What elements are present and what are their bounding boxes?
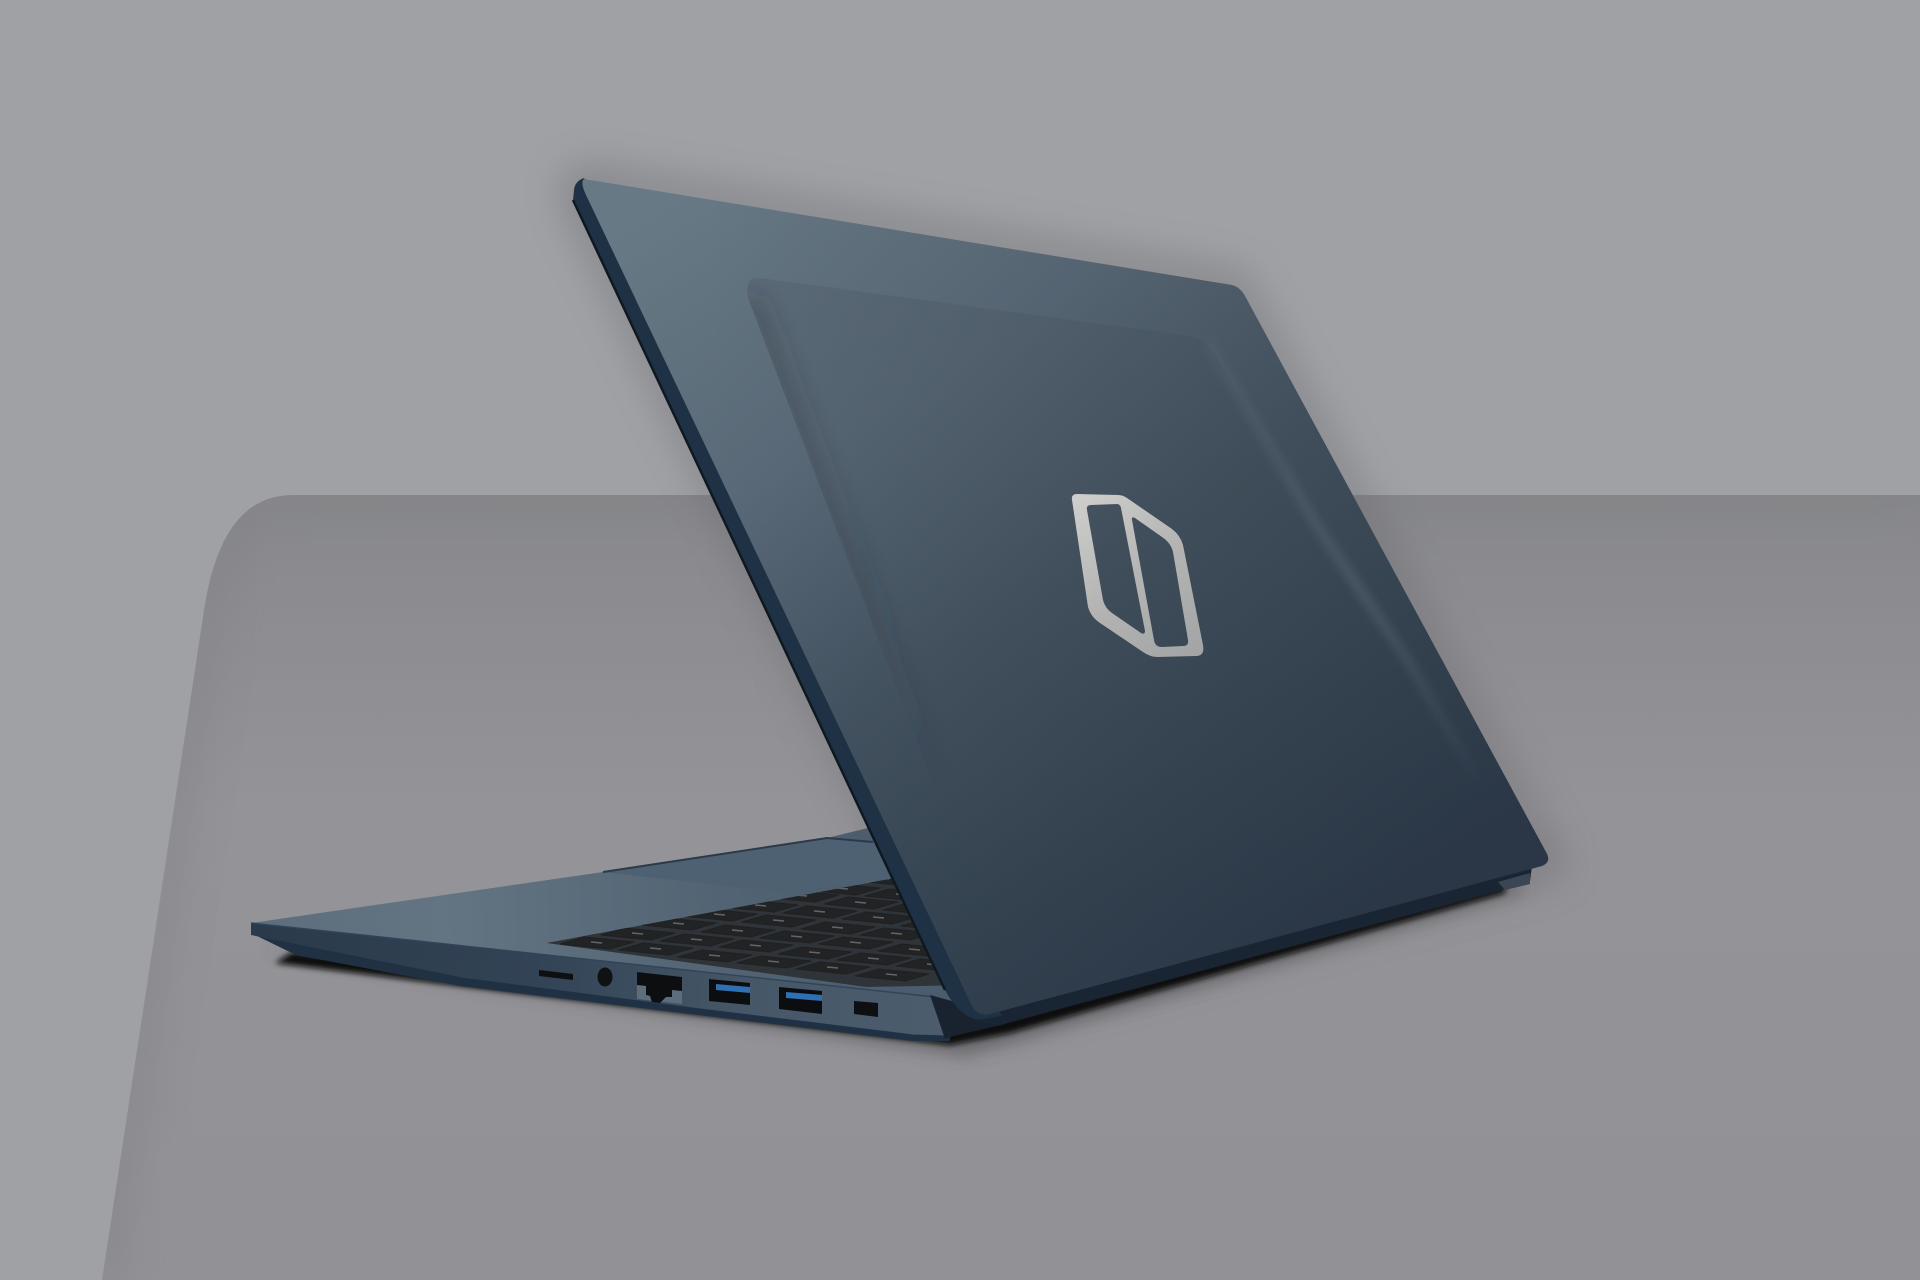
table surface [102,495,1920,1280]
port: USB 2 [779,987,822,1014]
side face with ports [251,923,948,1037]
deck surface [251,828,990,1005]
hinge foot [1498,873,1530,890]
lid base strip [975,866,1532,1025]
port: audio jack [598,968,612,986]
hinge block [930,995,1005,1039]
keyboard [547,878,942,987]
base underside wedge [251,925,950,1041]
lid soft shadow [575,179,1549,1016]
lid recessed panel [747,278,1426,692]
touchpad [603,838,905,892]
port: SD card slot [539,970,573,980]
port: lock slot [854,1001,878,1017]
port: ethernet [637,972,682,1004]
port: USB 1 [709,979,750,1005]
base shadow on the table [262,880,1530,1056]
lid [582,179,1548,1015]
laptop base [251,828,1005,1041]
logo [1072,494,1203,657]
lid edge [573,178,1002,1020]
